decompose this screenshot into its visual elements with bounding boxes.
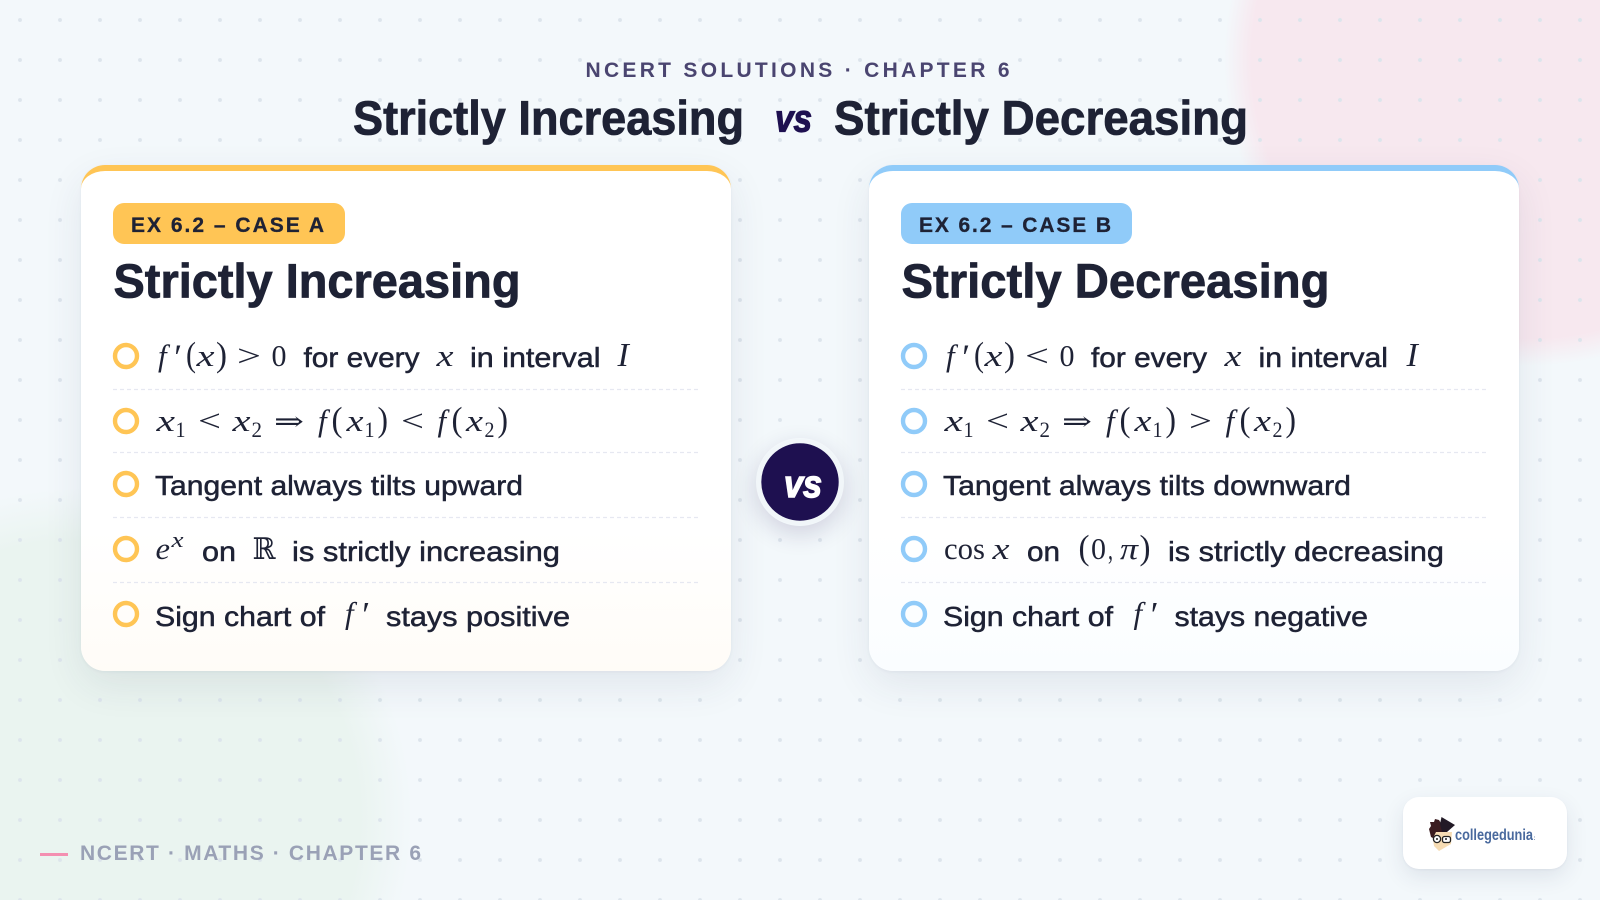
row 4: x xyxy=(991,531,1010,566)
row 4: e xyxy=(156,531,170,566)
row 1: x xyxy=(195,338,215,373)
row 5: f xyxy=(345,596,358,630)
row 1: for every xyxy=(1091,342,1207,373)
row 5 xyxy=(115,594,570,634)
row 2: ( xyxy=(1240,400,1250,439)
row 2: ( xyxy=(332,400,342,439)
row 1: ) xyxy=(1004,335,1015,374)
panel: case A strictly increasing xyxy=(81,165,731,671)
row 2: ) xyxy=(1286,400,1296,439)
row 4: is strictly increasing xyxy=(292,536,560,567)
footer label: NCERT · MATHS · CHAPTER 6 xyxy=(80,842,421,865)
row 2: ( xyxy=(452,400,462,439)
row 2: x xyxy=(465,403,483,438)
row 2: x xyxy=(943,403,963,438)
row 1: 0 xyxy=(272,338,286,373)
row 1: for every xyxy=(304,342,420,373)
row 2: x xyxy=(155,403,175,438)
row 2: x xyxy=(345,403,364,438)
row 1 xyxy=(115,335,630,377)
row 4: cos xyxy=(944,531,985,566)
row 2: 2 xyxy=(252,417,262,442)
row 5: f xyxy=(1134,596,1146,630)
row 1: in interval xyxy=(470,342,600,373)
row 4: x xyxy=(170,527,184,552)
row 2: < xyxy=(198,403,221,438)
wordmark: : xyxy=(1534,836,1536,842)
wordmark: collegedunia xyxy=(1455,827,1533,844)
row 5: Sign chart of xyxy=(155,601,325,632)
row 4: is strictly decreasing xyxy=(1168,536,1444,567)
row 4: π xyxy=(1120,531,1140,566)
eyebrow: NCERT SOLUTIONS · CHAPTER 6 xyxy=(586,59,1010,82)
row 2 xyxy=(903,400,1296,442)
row 2: f xyxy=(1226,403,1238,438)
row 2: 2 xyxy=(484,417,494,442)
row 2: ( xyxy=(1120,400,1130,439)
row 3: Tangent always tilts downward xyxy=(943,470,1351,501)
vs badge: vs xyxy=(784,464,822,506)
badge: case B xyxy=(901,203,1132,244)
heading: strictly increasing: Strictly Increasing xyxy=(114,256,520,308)
icon: student mascot xyxy=(1429,817,1455,851)
row 5: stays positive xyxy=(386,601,570,632)
row 1: I xyxy=(616,337,630,374)
title: Strictly Decreasing xyxy=(834,92,1248,146)
vs badge xyxy=(756,438,844,526)
row 1: ( xyxy=(186,335,196,374)
row 2: 2 xyxy=(1272,417,1282,442)
row 1: f xyxy=(946,338,959,373)
row 1 xyxy=(903,335,1420,377)
row 2: f xyxy=(1106,403,1119,438)
row 1: < xyxy=(1025,338,1049,373)
row 1: ( xyxy=(974,335,984,374)
row 2: f xyxy=(318,403,331,438)
row 2: < xyxy=(401,403,424,438)
row 5: ′ xyxy=(360,594,369,634)
badge: case A: EX 6.2 – CASE A xyxy=(131,214,324,237)
row 4: on xyxy=(1027,536,1060,567)
row 5: stays negative xyxy=(1174,601,1368,632)
logo card: collegedunia xyxy=(1403,797,1567,869)
row 2: 2 xyxy=(1040,417,1050,442)
row 2: > xyxy=(1189,403,1212,438)
row 4: on xyxy=(202,536,236,567)
row 2: x xyxy=(1133,403,1152,438)
row 2: 1 xyxy=(364,417,374,442)
row 2: ⇒ xyxy=(1062,407,1092,437)
row 5: Sign chart of xyxy=(943,601,1113,632)
row 1: ′ xyxy=(960,337,969,377)
title xyxy=(353,92,1248,146)
heading: strictly decreasing: Strictly Decreasing xyxy=(902,256,1330,308)
title: Strictly Increasing xyxy=(353,92,744,146)
row 1: f xyxy=(158,338,171,373)
row 4: ( xyxy=(1078,528,1090,567)
row 1: x xyxy=(1223,338,1242,373)
row 2: 1 xyxy=(1152,417,1162,442)
row 5 xyxy=(903,594,1368,634)
row 1: I xyxy=(1406,337,1420,374)
row 2: 1 xyxy=(964,417,974,442)
row 2: x xyxy=(1019,403,1039,438)
row 1: x xyxy=(435,338,454,373)
row 1: > xyxy=(237,338,261,373)
row 2: ⇒ xyxy=(274,407,304,437)
row 2: x xyxy=(231,403,251,438)
row 2: ) xyxy=(1166,400,1176,439)
title: vs xyxy=(775,98,812,140)
row 4: ) xyxy=(1140,528,1150,567)
row 1: 0 xyxy=(1060,338,1074,373)
badge: case B: EX 6.2 – CASE B xyxy=(919,214,1111,237)
row 4 xyxy=(903,528,1444,567)
row 2: ) xyxy=(498,400,508,439)
row 1: ′ xyxy=(172,337,181,377)
row 2: x xyxy=(1253,403,1271,438)
row 4 xyxy=(115,527,560,567)
row 3: Tangent always tilts upward xyxy=(155,470,523,501)
row 4: ℝ xyxy=(252,532,276,567)
row 2: f xyxy=(438,403,450,438)
row 1: in interval xyxy=(1258,342,1388,373)
row 2: ) xyxy=(378,400,388,439)
badge: case A xyxy=(113,203,345,244)
row 1: x xyxy=(983,338,1003,373)
row 4: 0 xyxy=(1091,531,1106,566)
row 5: ′ xyxy=(1148,594,1158,634)
background blob: pink xyxy=(1200,0,1600,400)
row 4: , xyxy=(1108,531,1113,566)
row 1: ) xyxy=(216,335,227,374)
panel: case B strictly decreasing xyxy=(869,165,1519,671)
row 2: 1 xyxy=(176,417,186,442)
row 2 xyxy=(115,400,508,442)
background blob: green xyxy=(0,470,430,900)
row 2: < xyxy=(986,403,1009,438)
